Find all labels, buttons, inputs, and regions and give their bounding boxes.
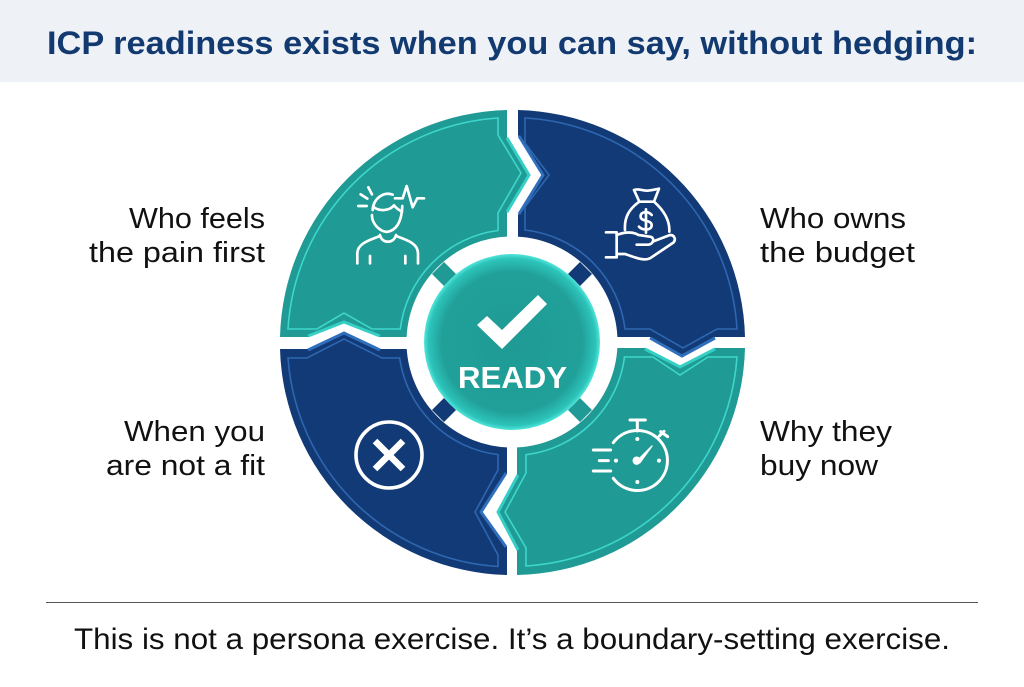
divider line [46, 602, 978, 603]
center badge: ready [416, 246, 608, 438]
icon: money bag in hand [606, 189, 675, 259]
label: when you are not a fit: are not a fit [106, 450, 265, 482]
icon: stopwatch [593, 420, 668, 490]
panel: who feels the pain first [280, 110, 530, 337]
label: who feels the pain first: the pain first [89, 237, 265, 269]
label: why they buy now: Why they [760, 416, 893, 448]
panel: when you are not a fit [280, 332, 507, 575]
icon: person with headache [357, 186, 424, 263]
label: when you are not a fit: When you [124, 416, 265, 448]
panel: why they buy now [497, 348, 745, 575]
ready label: READY [458, 360, 567, 395]
label: why they buy now: buy now [760, 450, 879, 482]
header band [0, 0, 1024, 82]
label: when you are not a fit [106, 416, 265, 482]
title: ICP readiness exists when you can say, without hedging: [47, 25, 977, 61]
icon: x in circle [356, 422, 422, 488]
closing statement: This is not a persona exercise. It’s a boundary-setting exercise. [74, 623, 950, 656]
label: who feels the pain first [89, 203, 265, 269]
label: why they buy now [760, 416, 893, 482]
label: who owns the budget: Who owns [760, 203, 906, 235]
label: who feels the pain first: Who feels [129, 203, 265, 235]
label: who owns the budget: the budget [760, 237, 915, 269]
panel: who owns the budget [518, 110, 745, 356]
icon: check mark [477, 295, 547, 349]
label: who owns the budget [760, 203, 915, 269]
